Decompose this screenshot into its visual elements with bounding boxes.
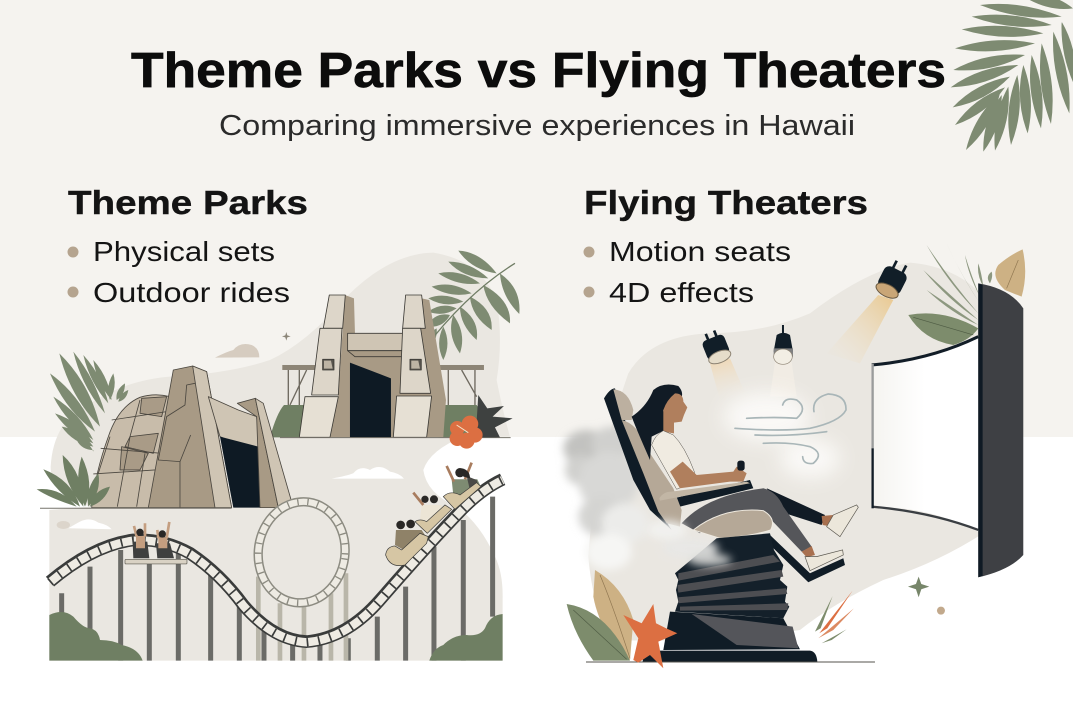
- ground line: [586, 660, 875, 663]
- bushes: [49, 612, 503, 661]
- tan leaf: [995, 249, 1025, 297]
- smoke: grey cloud: [563, 427, 648, 570]
- woman: [632, 385, 858, 571]
- seat cushion: [693, 510, 773, 538]
- bullet list: theme parks: Physical sets: [93, 236, 275, 267]
- screen: [872, 337, 978, 532]
- wind lines: [735, 394, 846, 464]
- coaster track: [50, 479, 503, 642]
- bullet list: flying theaters: 4D effects: [609, 277, 754, 308]
- hibiscus flower with dark leaves: [450, 395, 513, 449]
- lamp: right spotlight: [873, 257, 912, 302]
- illustration: motion seat theater: [563, 243, 1025, 668]
- top-right palm frond: [951, 0, 1073, 152]
- green leaf: [908, 313, 978, 345]
- smoke: seat base: [647, 521, 732, 566]
- lamp: left spotlight: [699, 328, 733, 367]
- bullet list: theme parks: Outdoor rides: [93, 277, 290, 308]
- sparks: [815, 591, 854, 643]
- plant: green and tan leaves: [567, 570, 633, 661]
- palm frond behind screen: [923, 243, 992, 325]
- screen side panel: [978, 283, 1023, 577]
- small fan plant: [37, 455, 110, 507]
- ground line lower: [40, 507, 232, 510]
- far temple: [270, 295, 497, 437]
- motion base: [643, 533, 817, 662]
- spotlight beams: [710, 295, 893, 400]
- background blob: [588, 263, 983, 641]
- bullet list: theme parks: [68, 236, 290, 308]
- heading: flying theaters: Flying Theaters: [584, 184, 868, 221]
- bullet list: flying theaters: [584, 236, 791, 308]
- background blob: [49, 253, 510, 661]
- orange flower leaves: [623, 604, 677, 668]
- dot: [937, 607, 945, 615]
- cloud: [215, 344, 259, 358]
- front temple: [92, 366, 293, 508]
- clouds: [57, 467, 404, 529]
- coaster cars: incline with riders: [386, 463, 481, 566]
- bullet list: flying theaters: Motion seats: [609, 236, 791, 267]
- coaster car: top left: [125, 522, 187, 564]
- seat: [604, 388, 845, 582]
- panel: flying theaters: [563, 184, 1025, 668]
- smoke: wind cloud: [723, 392, 840, 478]
- panel: theme parks: [37, 184, 520, 661]
- palm frond upper: [422, 251, 520, 360]
- left palm frond: [50, 352, 128, 452]
- title: Theme Parks vs Flying Theaters: [131, 44, 946, 98]
- subtitle: Comparing immersive experiences in Hawaii: [219, 110, 855, 142]
- coaster supports: [62, 497, 493, 661]
- ground line upper: [280, 436, 511, 439]
- sparkle star: [908, 577, 929, 597]
- heading: theme parks: Theme Parks: [68, 184, 308, 221]
- lamp: middle spotlight: [774, 325, 793, 364]
- coaster loop: [252, 496, 352, 609]
- loop supports: [258, 573, 346, 661]
- sparkle: [282, 332, 291, 341]
- illustration: temples and roller coaster: [37, 251, 520, 661]
